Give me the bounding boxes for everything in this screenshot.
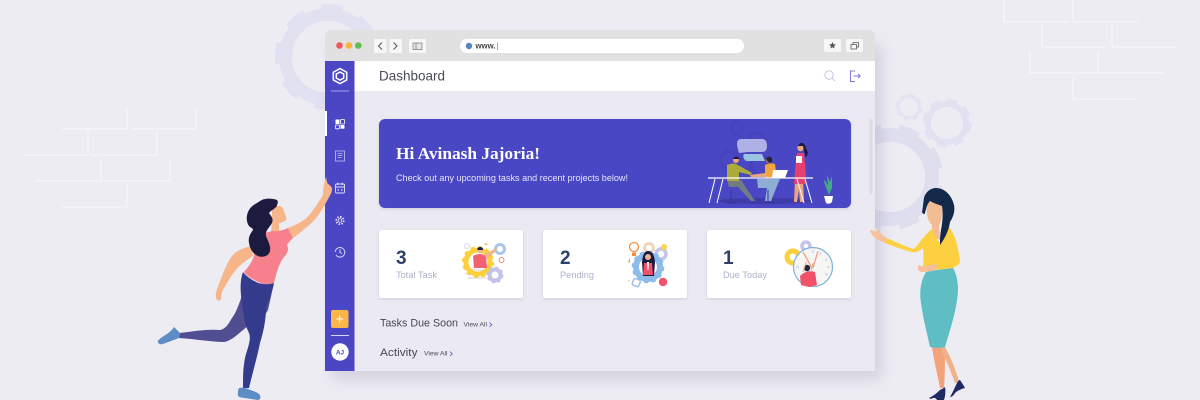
card: due today bbox=[707, 230, 851, 298]
add button bbox=[331, 310, 348, 328]
stat number: 3 bbox=[396, 248, 407, 269]
gear: medium right bbox=[924, 100, 970, 146]
gear: small right bbox=[896, 94, 922, 120]
illustration: woman in gear bbox=[628, 242, 667, 287]
sidebar bbox=[325, 61, 354, 371]
view all link: View All bbox=[424, 350, 448, 358]
window shadow bbox=[331, 44, 882, 380]
section: activity bbox=[380, 347, 452, 359]
search icon bbox=[825, 71, 835, 81]
stat label: Due Today bbox=[723, 270, 767, 281]
avatar: AJ bbox=[336, 350, 345, 356]
address bar bbox=[460, 39, 744, 53]
icon: calendar bbox=[336, 183, 344, 193]
gear: large right bbox=[832, 119, 948, 235]
stat number: 1 bbox=[723, 248, 734, 269]
icon: history bbox=[335, 248, 345, 257]
back and forward buttons bbox=[374, 39, 402, 53]
section: tasks due soon: Tasks Due Soon bbox=[380, 318, 458, 330]
greeting heading: Hi Avinash Jajoria! bbox=[396, 144, 540, 163]
illustration: clock bbox=[787, 242, 832, 287]
greeting banner bbox=[379, 119, 851, 208]
logout icon bbox=[850, 71, 860, 82]
logo bbox=[333, 68, 347, 84]
stat number: 2 bbox=[560, 248, 571, 269]
browser toolbar bbox=[325, 30, 875, 61]
page title: Dashboard bbox=[379, 67, 445, 83]
illustration: team meeting bbox=[708, 122, 833, 204]
stat label: Total Task bbox=[396, 270, 437, 281]
section: activity: Activity bbox=[380, 347, 418, 359]
avatar bbox=[331, 343, 349, 361]
window button bbox=[846, 39, 863, 52]
active indicator bbox=[325, 111, 327, 136]
icon: document bbox=[336, 151, 344, 161]
browser window bbox=[325, 30, 875, 371]
icon: dashboard bbox=[336, 120, 344, 129]
card: total task bbox=[379, 230, 523, 298]
header bar bbox=[354, 61, 875, 91]
scrollbar bbox=[870, 119, 872, 194]
icon: settings bbox=[336, 217, 344, 224]
figure: woman presenting bbox=[870, 188, 965, 400]
gear: behind window top left bbox=[272, 1, 384, 113]
sidebar toggle button bbox=[409, 39, 426, 53]
card: pending bbox=[543, 230, 687, 298]
greeting subtext: Check out any upcoming tasks and recent projects below! bbox=[396, 173, 628, 183]
window control dots bbox=[336, 42, 362, 49]
address bar: www. bbox=[475, 42, 496, 51]
content background bbox=[325, 61, 875, 371]
view all link: View All bbox=[464, 322, 488, 328]
stat label: Pending bbox=[560, 270, 594, 281]
star button bbox=[824, 39, 841, 52]
illustration: gears and man bbox=[464, 243, 504, 282]
figure: woman reaching up bbox=[158, 177, 332, 400]
